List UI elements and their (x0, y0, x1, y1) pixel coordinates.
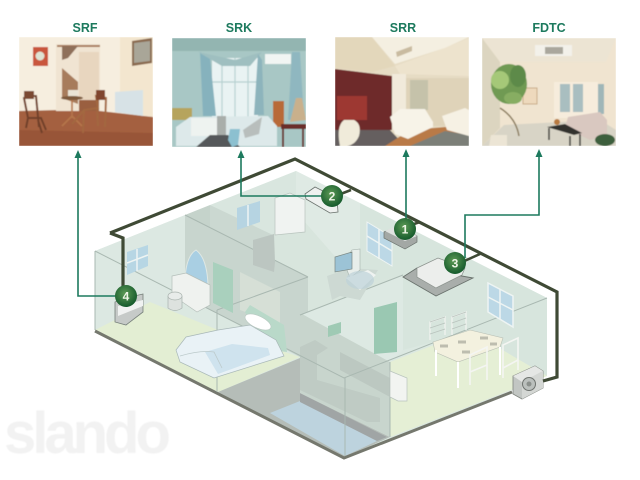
hallway floor blue (270, 401, 377, 456)
icon: outdoor unit (513, 366, 543, 399)
photo: SRF room (19, 37, 153, 146)
icon: indoor unit 1 (384, 225, 417, 249)
icon: indoor unit 4 (115, 294, 143, 325)
icon: doors (213, 262, 397, 354)
house walls (95, 171, 547, 458)
icon: dresser and mirror (168, 250, 210, 312)
photo: FDTC room (482, 38, 616, 146)
photo: SRK room (172, 38, 306, 147)
icon: windows (127, 201, 513, 327)
bedroom back wall (95, 215, 185, 330)
living room back wall (300, 275, 403, 362)
house cutaway illustration (95, 171, 547, 458)
heading: SRK: SRK (226, 21, 252, 35)
heading: SRF: SRF (72, 21, 98, 35)
right wall (296, 171, 360, 285)
rear room side wall (210, 205, 273, 290)
rear wall (210, 171, 296, 255)
icon: indoor unit 2 (305, 187, 338, 213)
sofa (340, 352, 390, 397)
arrow: unit 2 to SRK (238, 150, 325, 196)
rear wall shaded return (185, 205, 210, 275)
hallway floor grey (218, 358, 390, 458)
heading: SRR: SRR (390, 21, 416, 35)
arrow: unit 4 to SRF (74, 150, 116, 296)
badge 3: 3 (452, 256, 459, 270)
pipe branch to unit 1 (408, 222, 420, 226)
icon: ceiling cassette unit 3 (403, 258, 473, 296)
icon: dining table (430, 312, 518, 388)
icon: desk and computer (327, 249, 378, 300)
heading: FDTC: FDTC (532, 21, 566, 35)
badge 3 (444, 252, 466, 274)
hallway glass wall (300, 313, 390, 437)
arrow: unit 3 to FDTC (465, 149, 542, 258)
badge 2 (321, 185, 343, 207)
badge 1: 1 (402, 222, 409, 236)
badge 4 (115, 285, 137, 307)
pipe branch to unit 4 (110, 233, 123, 290)
icon: cabinet (390, 371, 407, 401)
floor rim (95, 331, 512, 458)
photo: SRR room (335, 37, 469, 146)
icon: bed (176, 305, 287, 378)
watermark: slando (4, 401, 169, 466)
pipe branch to unit 3 (460, 254, 480, 263)
sofa base (300, 340, 380, 422)
glass edge lines (95, 215, 547, 456)
upper room floor (273, 203, 403, 315)
badge 2: 2 (329, 190, 336, 204)
bedroom right partition (185, 215, 308, 358)
arrow: unit 1 to SRR (402, 149, 410, 222)
badge 1 (394, 218, 416, 240)
hallway step (300, 393, 387, 441)
icon: shelf (253, 234, 275, 272)
pipe branch to unit 2 (338, 190, 351, 195)
icon: wardrobe (275, 193, 305, 235)
living room floor (390, 331, 547, 437)
refrigerant pipe (110, 159, 557, 381)
bedroom floor (95, 302, 300, 392)
badge 4: 4 (123, 290, 130, 304)
